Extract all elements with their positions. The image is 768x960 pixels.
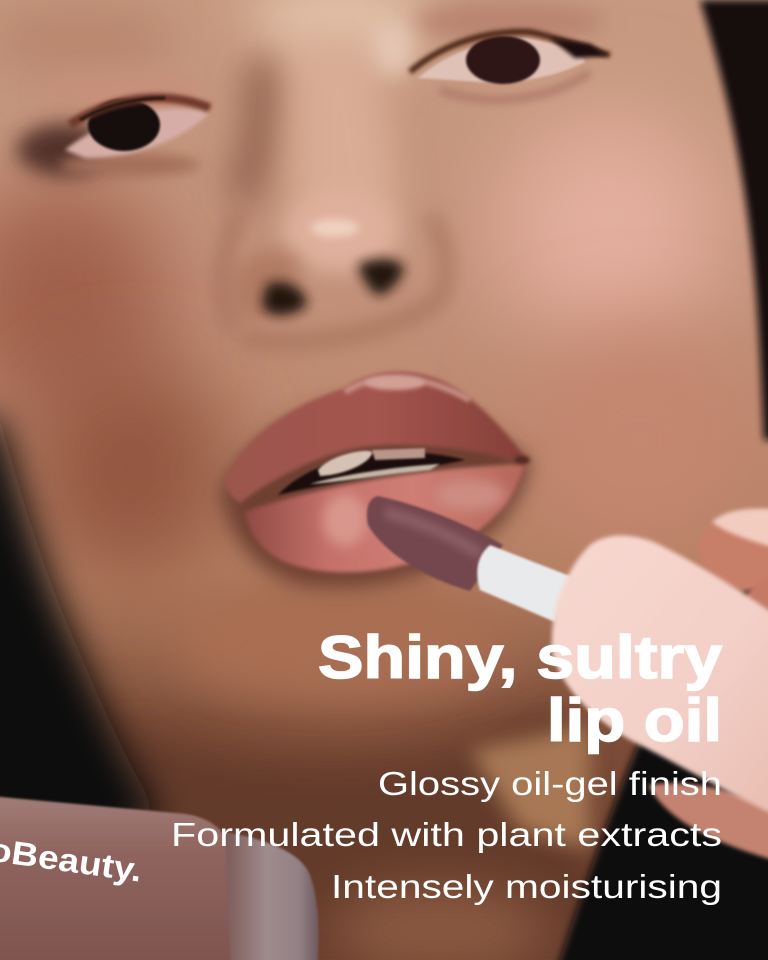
lips — [220, 372, 530, 587]
headline: Shiny, sultry — [318, 624, 723, 691]
shadow around the lips — [220, 401, 530, 587]
upper lip — [225, 372, 527, 503]
benefits list — [171, 765, 722, 905]
headline: lip oil — [547, 687, 722, 754]
product bottle — [0, 795, 318, 960]
applicator tip — [367, 496, 503, 591]
lower lip — [245, 464, 524, 572]
hair: left side — [0, 420, 160, 860]
eye: right — [368, 2, 610, 100]
clear bottle end — [225, 832, 318, 960]
jaw shadow and neck — [128, 706, 592, 932]
applicator cap — [552, 536, 768, 822]
teeth — [318, 451, 372, 476]
nose — [223, 40, 446, 342]
fingers — [648, 508, 768, 865]
applicator stem — [477, 545, 575, 622]
eye: left — [17, 72, 210, 177]
hair and shadow: lower right — [554, 587, 768, 960]
headline — [318, 624, 723, 754]
benefits list: Glossy oil-gel finish — [378, 765, 722, 802]
hair: top right — [700, 0, 768, 440]
mouth opening — [278, 452, 465, 495]
benefits list: Formulated with plant extracts — [171, 816, 722, 853]
lip oil applicator — [367, 496, 575, 622]
benefits list: Intensely moisturising — [331, 868, 722, 905]
